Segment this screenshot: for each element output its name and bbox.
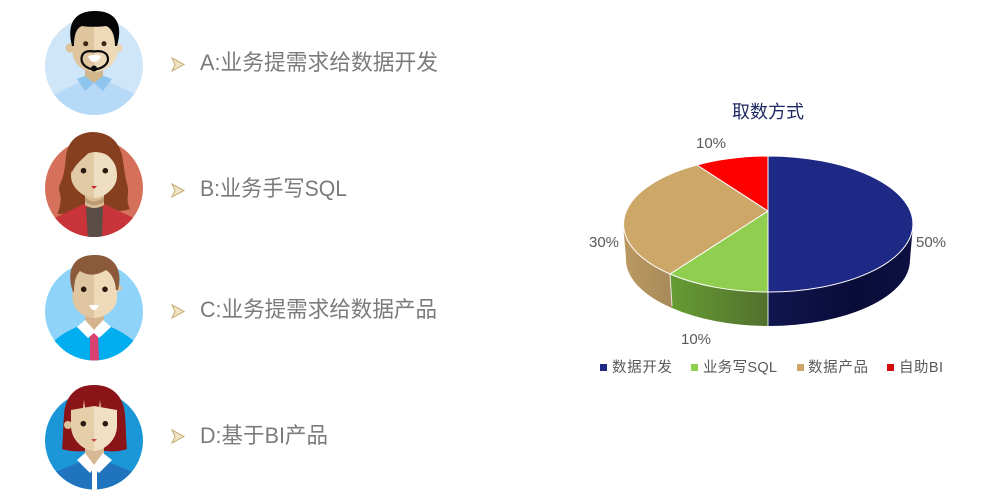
legend: 业务写SQL	[703, 359, 777, 376]
pie side walls	[623, 224, 913, 326]
data labels	[589, 135, 946, 348]
avatar A: man with goatee	[45, 11, 143, 120]
legend: 自助BI	[899, 359, 943, 376]
avatar D: woman with red bob	[45, 385, 143, 495]
arrow D	[172, 430, 184, 443]
arrow B	[172, 184, 184, 197]
avatar B: woman with long wavy hair	[45, 132, 143, 240]
chart title: 取数方式	[732, 102, 804, 122]
option B row: B:业务手写SQL	[200, 176, 347, 201]
avatar C: man with tie	[45, 255, 143, 365]
option D row: D:基于BI产品	[200, 423, 328, 448]
option C row: C:业务提需求给数据产品	[200, 297, 437, 322]
arrow A	[172, 58, 184, 71]
option A row: A:业务提需求给数据开发	[200, 50, 438, 75]
3D pie chart	[623, 156, 913, 326]
legend: 数据产品	[808, 359, 868, 376]
pie slices top	[624, 156, 913, 292]
legend	[600, 359, 943, 376]
legend: 数据开发	[612, 359, 672, 376]
arrow C	[172, 305, 184, 318]
data labels: 10%	[681, 331, 711, 348]
data labels: 50%	[916, 234, 946, 251]
data labels: 30%	[589, 234, 619, 251]
data labels: 10%	[696, 135, 726, 152]
